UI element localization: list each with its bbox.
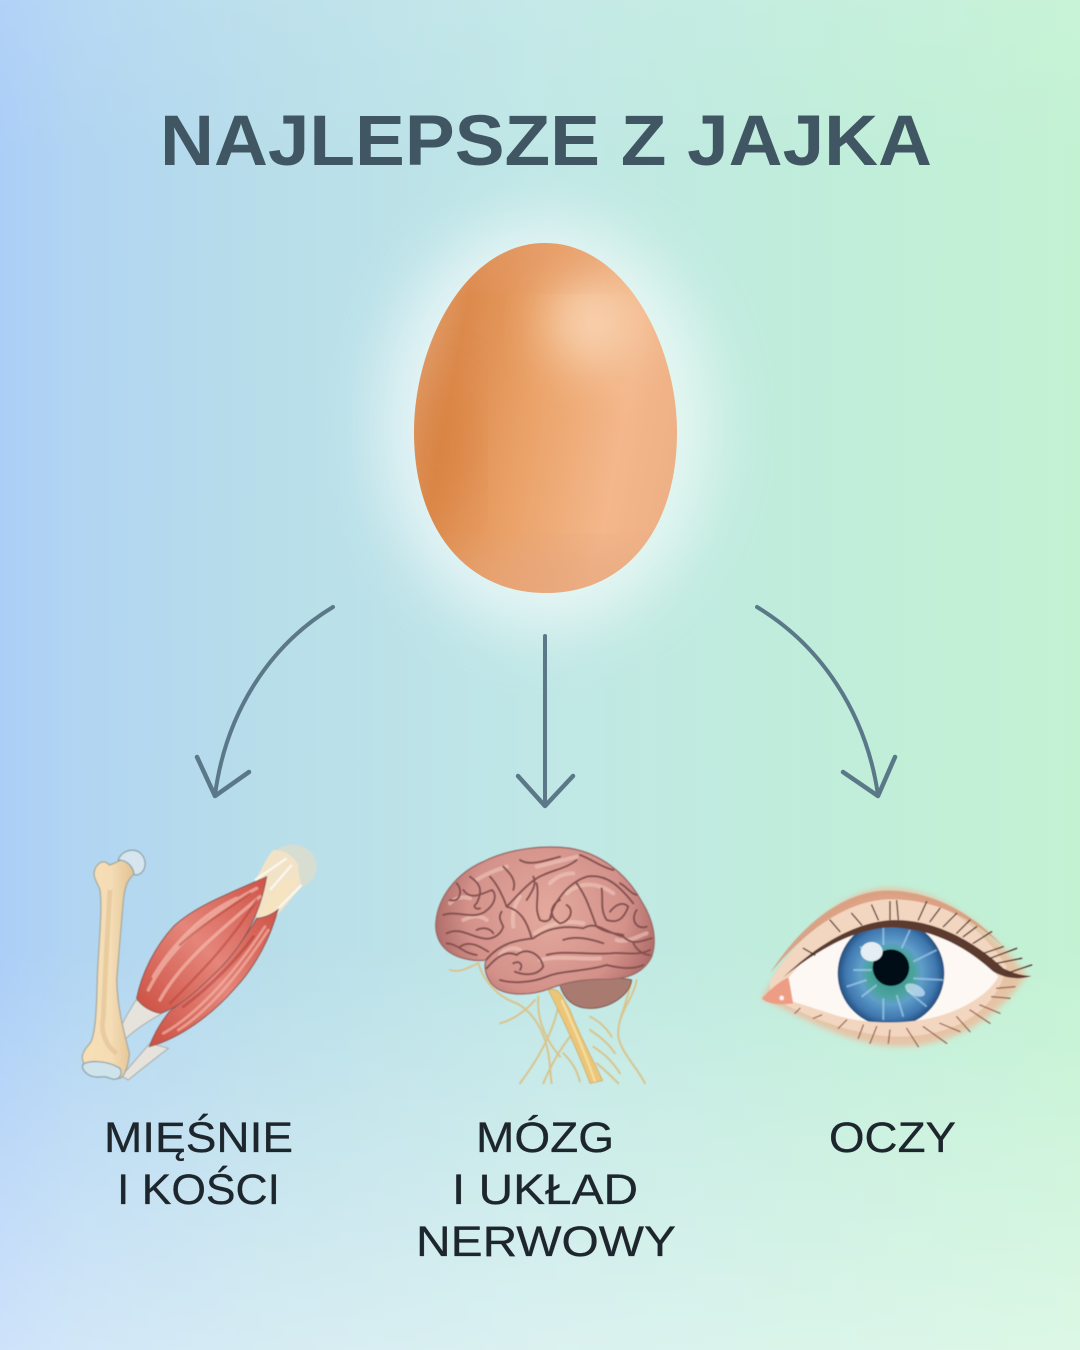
muscle fibres [148,888,268,1033]
lower muscle belly [149,909,278,1047]
bone [82,860,135,1078]
icon: egg [414,228,677,611]
label: brain and nervous system: I UKŁAD [452,1166,638,1214]
spinal cord [548,989,603,1083]
arrow: egg to muscles and bones [197,607,333,796]
upper lash line [783,920,1032,978]
label: brain and nervous system: NERWOWY [416,1218,676,1266]
catchlight [861,942,883,961]
title: NAJLEPSZE Z JAJKA [160,102,932,181]
label: muscles and bones [104,1113,293,1214]
iris [838,920,944,1027]
cerebrum [436,847,654,994]
label: eyes: OCZY [829,1114,956,1162]
arrow: egg to eyes [757,607,895,796]
icon: eye [762,888,1032,1047]
eyelid crease [770,891,1003,973]
brain highlights [450,857,647,960]
sclera [788,923,998,1023]
lower lashes [795,987,1015,1047]
label: brain and nervous system: MÓZG [476,1114,614,1162]
upper muscle belly [137,877,267,1013]
tendons [118,1000,168,1080]
brain folds [443,855,652,982]
upper lashes [803,901,1032,973]
eyelid skin [762,888,1027,1047]
nerves [450,963,645,1083]
cerebellum [560,978,632,1008]
label: muscles and bones: I KOŚCI [117,1165,280,1214]
label: brain and nervous system [416,1114,676,1266]
pupil [873,949,909,986]
tear duct [762,977,793,1004]
label: muscles and bones: MIĘŚNIE [104,1113,293,1162]
icon: brain and nerves [436,847,654,1083]
arrow: egg to brain [518,636,573,806]
icon: bone and muscle [82,845,317,1080]
